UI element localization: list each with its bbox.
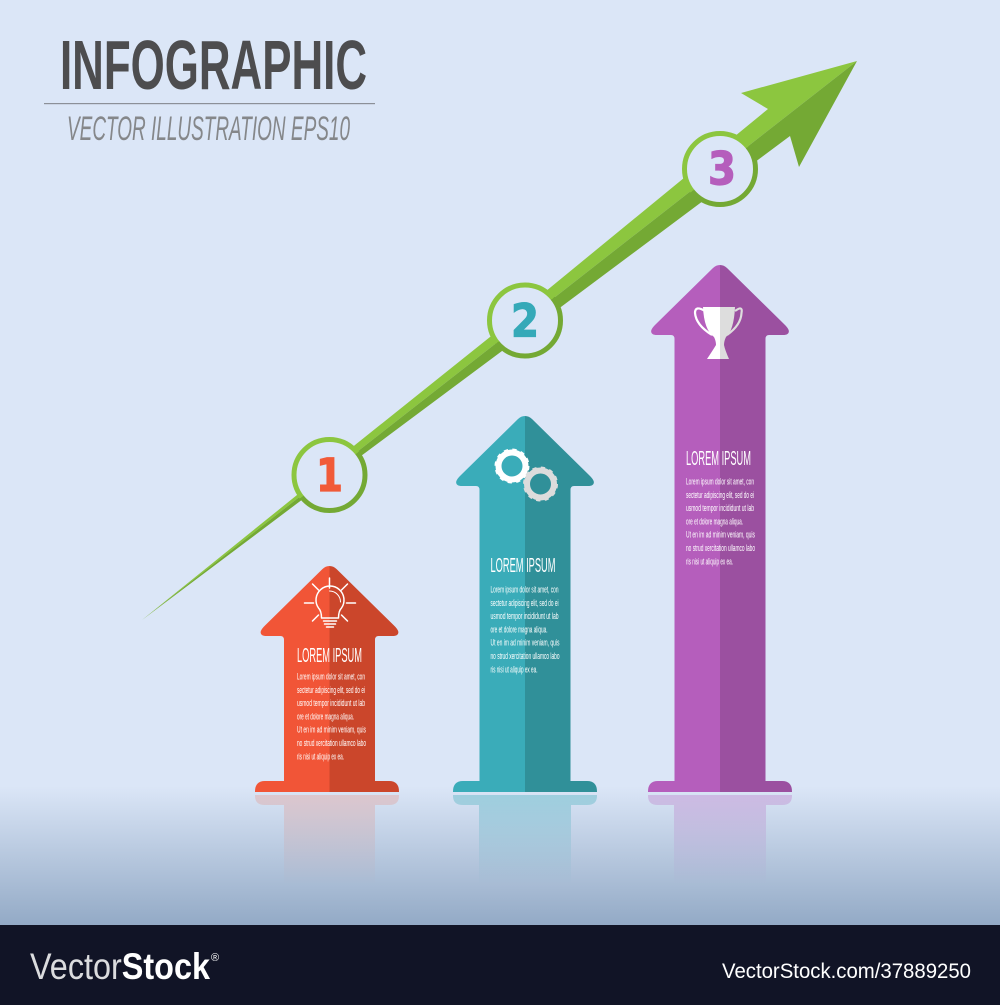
body text: Lorem ipsum dolor sit amet, con [297, 672, 365, 682]
body text: Ut en im ad minim veniam, quis [490, 638, 560, 648]
panel: purple arrow step 3: LOREM IPSUM [686, 448, 751, 470]
step 3 marker [684, 134, 756, 204]
body text: sectetur adipiscing elit, sed do ei [686, 490, 754, 500]
body text: Ut en im ad minim veniam, quis [686, 530, 755, 540]
image id: VectorStock.com/37889250 [722, 960, 971, 983]
body text: ris nisi ut aliquip ex ea. [686, 556, 733, 566]
body text: Lorem ipsum dolor sit amet, con [490, 584, 558, 594]
body text: ris nisi ut aliquip ex ea. [490, 664, 538, 674]
logo: vectorstock: VectorStock [30, 946, 210, 987]
panel: teal arrow step 2 [453, 416, 597, 792]
panel: red arrow step 1 [255, 566, 399, 792]
body text: ris nisi ut aliquip ex ea. [297, 752, 344, 762]
green growth arrow [142, 61, 857, 620]
body text [297, 672, 366, 762]
body text: ore et dolore magna aliqua. [490, 624, 548, 634]
subtitle: VECTOR ILLUSTRATION EPS10 [67, 110, 350, 148]
body text: no strud xercitation ullamco labo [490, 651, 560, 661]
icon: trophy [695, 307, 742, 359]
body text: ore et dolore magna aliqua. [686, 516, 743, 526]
step 2 marker [490, 285, 560, 356]
panel: red arrow step 1: LOREM IPSUM [297, 645, 362, 667]
body text: Ut en im ad minim veniam, quis [297, 724, 366, 734]
title block [44, 26, 375, 148]
body text: usmod tempor incididunt ut lab [490, 611, 558, 621]
body text [686, 476, 755, 566]
body text [490, 584, 560, 674]
step 3 marker: 3 [708, 142, 736, 196]
icon: light bulb [304, 578, 356, 627]
footer bar [0, 925, 1000, 1005]
reflections on the floor [255, 795, 792, 885]
title rule [44, 103, 375, 104]
body text: no strud xercitation ullamco labo [297, 738, 366, 748]
icon: gears [496, 450, 556, 500]
body text: no strud xercitation ullamco labo [686, 543, 755, 553]
body text: sectetur adipiscing elit, sed do ei [297, 685, 365, 695]
panel: teal arrow step 2: LOREM IPSUM [490, 555, 556, 577]
heading: infographic: INFOGRAPHIC [60, 26, 367, 104]
body text: Lorem ipsum dolor sit amet, con [686, 476, 754, 486]
step 1 marker: 1 [316, 449, 343, 502]
body text: ore et dolore magna aliqua. [297, 712, 354, 722]
step 1 marker [294, 440, 365, 510]
panel: purple arrow step 3 [648, 265, 792, 792]
body text: sectetur adipiscing elit, sed do ei [490, 598, 558, 608]
step 2 marker: 2 [511, 294, 539, 348]
registered mark: ® [211, 952, 219, 964]
body text: usmod tempor incididunt ut lab [297, 698, 365, 708]
body text: usmod tempor incididunt ut lab [686, 503, 754, 513]
